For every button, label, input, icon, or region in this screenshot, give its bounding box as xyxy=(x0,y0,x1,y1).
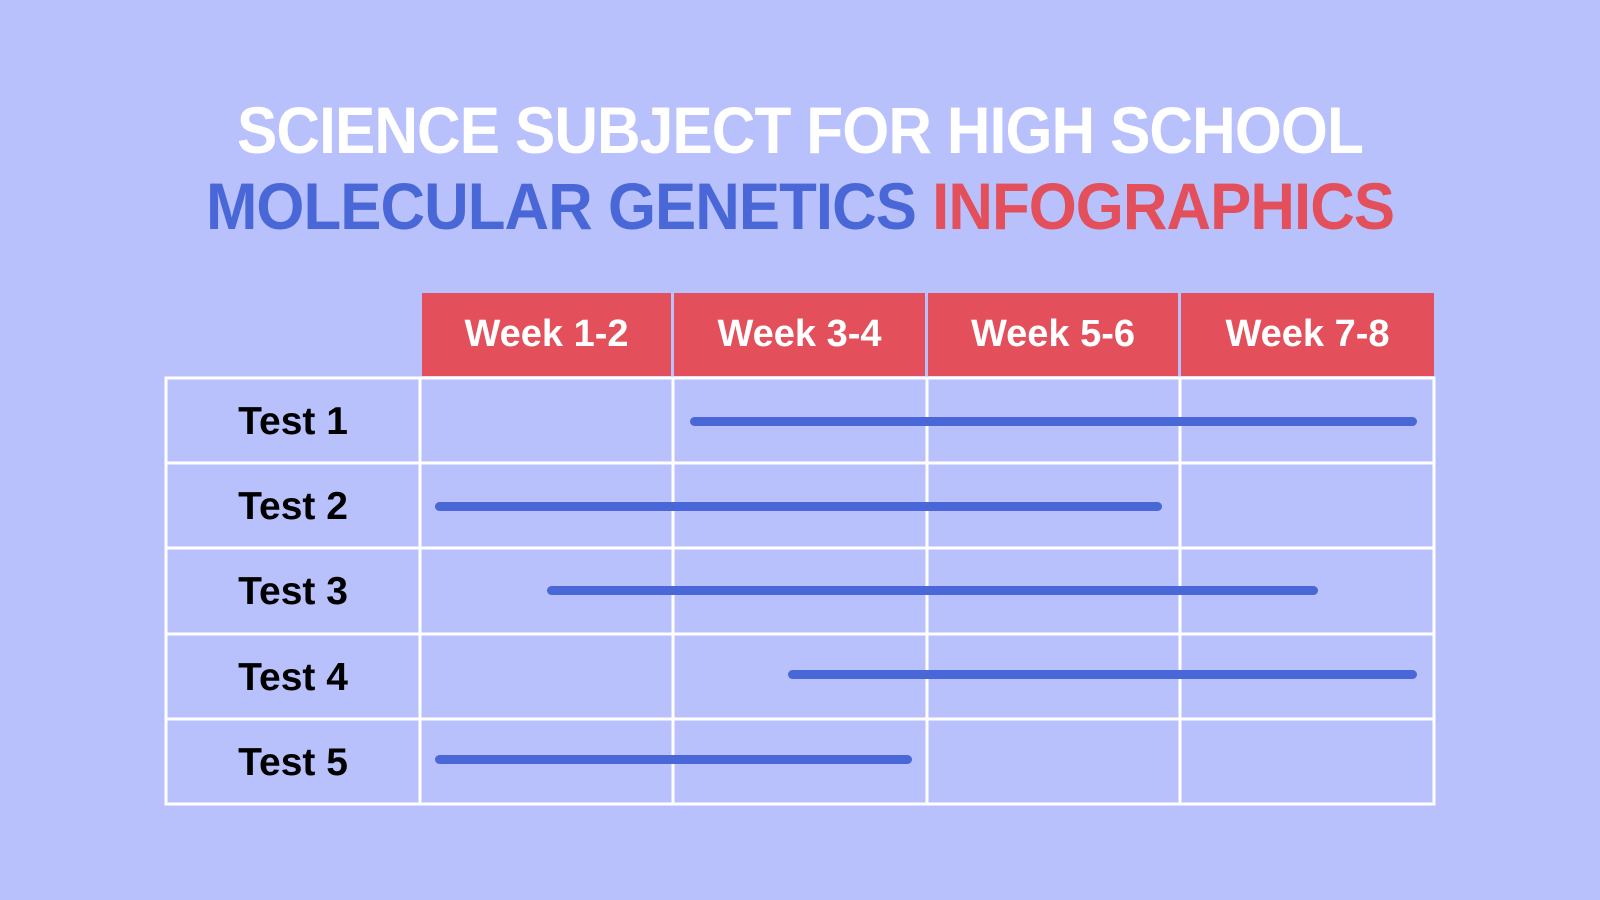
bar: Test 1 xyxy=(690,417,1417,426)
header: Week 1-2: Week 1-2 xyxy=(464,313,629,355)
header: Week 3-4 xyxy=(674,293,925,376)
row label: Test 5: Test 5 xyxy=(238,740,348,784)
title line 2: MOLECULAR GENETICS INFOGRAPHICS xyxy=(206,169,1394,243)
header: Week 5-6: Week 5-6 xyxy=(971,313,1135,355)
title line 1: SCIENCE SUBJECT FOR HIGH SCHOOL xyxy=(237,93,1363,167)
row label: Test 4: Test 4 xyxy=(238,656,348,698)
bar: Test 3 xyxy=(547,586,1318,595)
header: Week 1-2 xyxy=(422,293,671,376)
bar: Test 5 xyxy=(435,755,912,764)
header: Week 3-4: Week 3-4 xyxy=(717,313,882,355)
bar: Test 4 xyxy=(788,670,1417,679)
row label: Test 2: Test 2 xyxy=(238,484,348,528)
row label: Test 3: Test 3 xyxy=(238,570,348,613)
row label: Test 1: Test 1 xyxy=(238,400,348,442)
header: Week 7-8: Week 7-8 xyxy=(1225,313,1390,355)
header: Week 5-6 xyxy=(928,293,1178,376)
header: Week 7-8 xyxy=(1181,293,1434,376)
bar: Test 2 xyxy=(435,502,1162,511)
